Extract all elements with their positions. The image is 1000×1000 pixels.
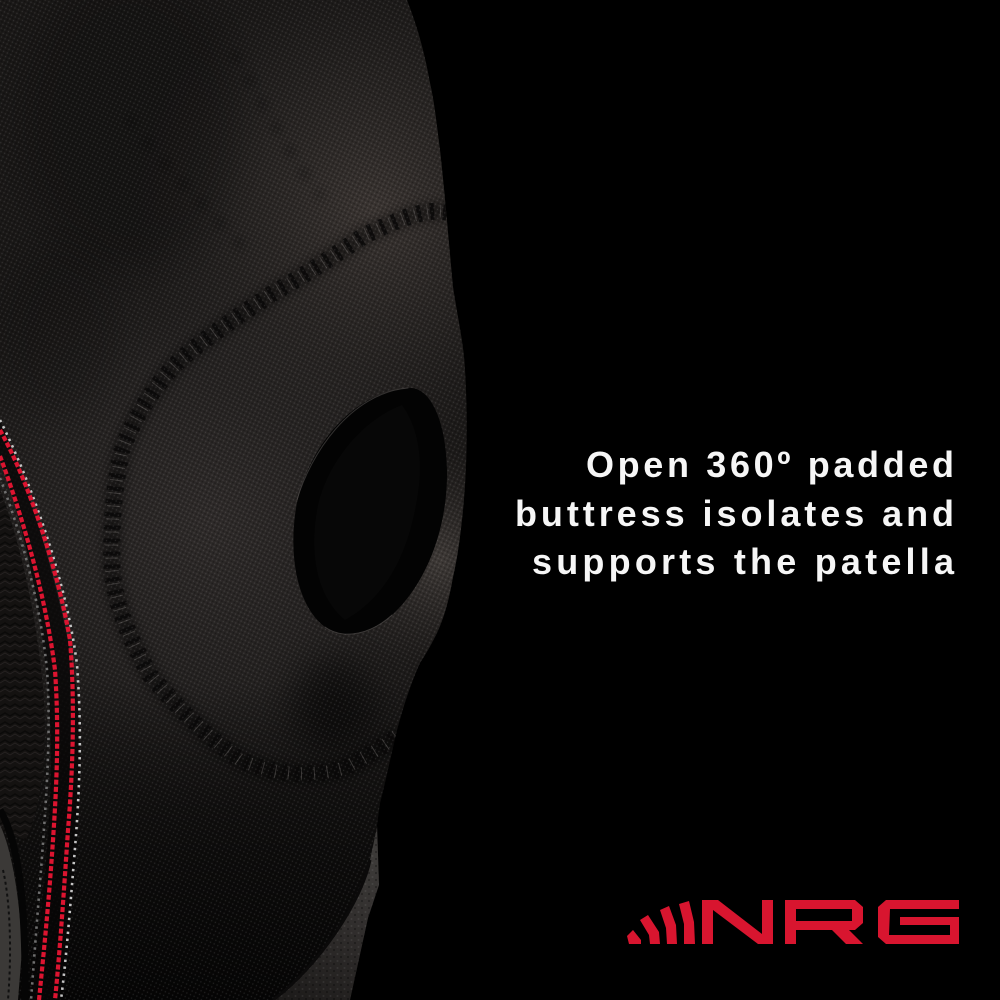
logo letter R [785,900,863,944]
mesh side panel [0,490,45,840]
bottom left gusset [0,810,25,1000]
red stitching [0,430,73,1000]
opening rim [293,388,447,634]
opening edge highlight [297,388,408,634]
fabric weave [0,0,480,1000]
caption line 2: buttress isolates and [515,493,954,534]
patella opening [293,388,447,634]
NRG logo [627,900,959,944]
logo signal arcs [627,901,695,944]
opening inner lining [314,405,420,620]
fabric body [0,0,480,1000]
bottom right strap [273,818,380,1000]
knee brace photo [0,0,480,1000]
zigzag seam around padded buttress [112,211,447,774]
logo letter G [878,900,959,944]
caption text [515,444,955,582]
logo letter N [702,900,773,944]
dark zip channel [0,420,80,1000]
perforation dots [130,55,320,255]
caption line 1: Open 360º padded [586,444,954,485]
soft shadows [3,661,382,1000]
grey side stitching [0,420,80,1000]
caption line 3: supports the patella [532,541,955,582]
